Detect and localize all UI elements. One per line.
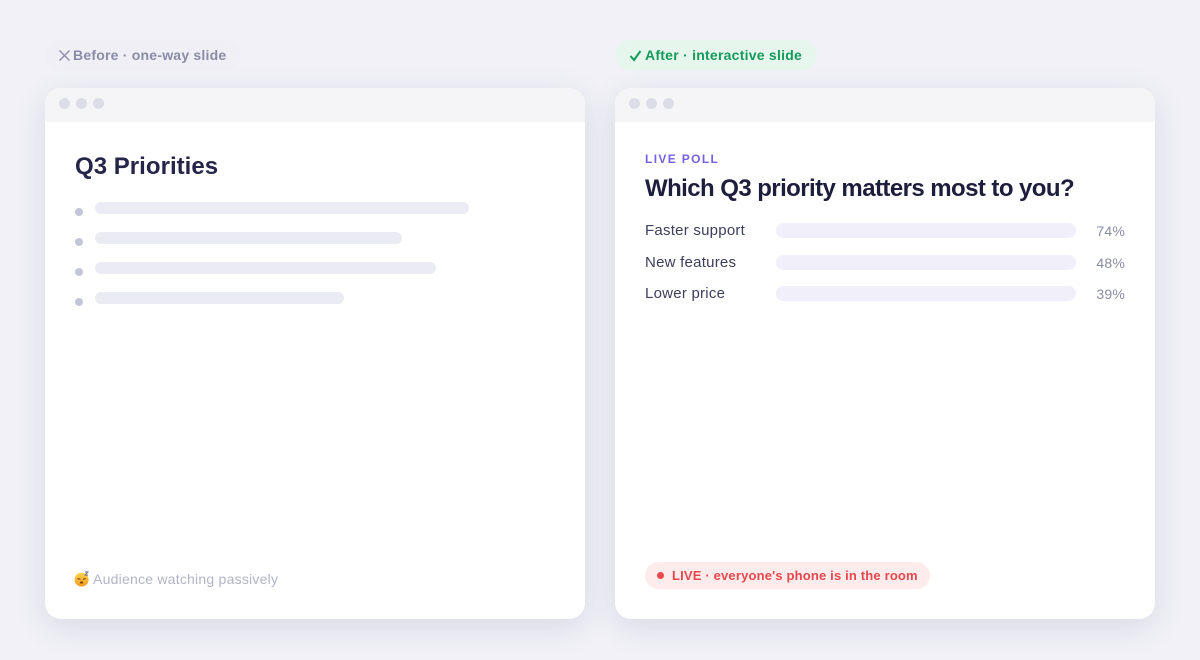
window dot [76,98,87,109]
heading: Q3 Priorities: Q3 Priorities [75,153,218,180]
live status badge [645,562,930,589]
row: lower price [645,285,1125,302]
window title bar [45,88,585,122]
percentage: 39% [1096,286,1125,302]
label: after [615,40,817,70]
bar track [776,286,1076,301]
window dot [646,98,657,109]
panel: after slide [615,88,1155,619]
eyebrow: live poll: LIVE POLL [645,152,719,166]
before label text: Before · one-way slide [73,47,226,63]
option label: New features [645,254,736,271]
bullet [75,268,83,276]
caption: audience passive: Audience watching passively [93,571,278,587]
placeholder line [95,232,402,244]
row: faster support [645,222,1125,239]
bar track [776,223,1076,238]
window dot [59,98,70,109]
window dot [93,98,104,109]
placeholder line [95,202,469,214]
percentage: 74% [1096,223,1125,239]
row: new features [645,254,1125,271]
window title bar [615,88,1155,122]
bullet [75,208,83,216]
option label: Faster support [645,222,745,239]
option label: Lower price [645,285,725,302]
bullet [75,298,83,306]
window dot [663,98,674,109]
bullet list placeholder [75,202,469,306]
panel: before slide [45,88,585,619]
icon: cross [59,50,70,61]
after label text: After · interactive slide [645,47,802,63]
window dot [629,98,640,109]
bullet [75,238,83,246]
placeholder line [95,262,436,274]
label: before [45,40,241,70]
bar track [776,255,1076,270]
badge text: LIVE · everyone's phone is in the room [672,568,918,583]
placeholder line [95,292,344,304]
icon: sleeping face [74,572,89,587]
icon: check [630,50,642,62]
live dot [657,572,664,579]
heading: poll question: Which Q3 priority matters most to you? [645,175,1074,202]
poll chart [645,222,1125,302]
percentage: 48% [1096,255,1125,271]
